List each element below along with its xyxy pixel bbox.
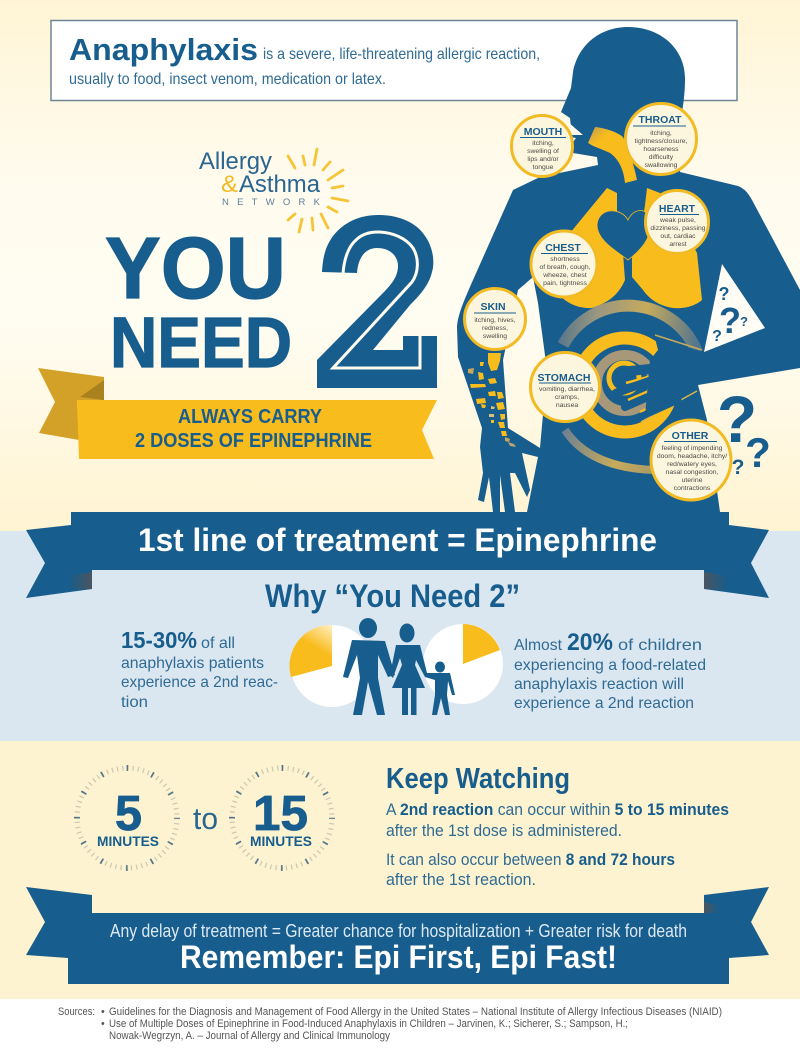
symptom: throat: THROAT <box>639 114 682 126</box>
text block: keep watching <box>386 763 729 889</box>
sources: Sources: <box>58 1006 95 1018</box>
blue ribbon: 1st line of treatment: 1st line of treatment = Epinephrine <box>138 522 657 558</box>
stat: almost 20%: experiencing a food-related <box>514 657 706 674</box>
stat: 15-30% <box>121 627 278 711</box>
question marks: ? <box>717 382 757 456</box>
symptom: chest: of breath, cough, <box>539 264 591 271</box>
symptom: stomach <box>530 352 600 422</box>
symptom: mouth: tongue <box>533 164 554 171</box>
stat: 15-30%: of all <box>201 635 235 652</box>
skin rash <box>468 353 516 447</box>
big outlined numeral 2 <box>317 215 437 388</box>
stat: almost 20%: anaphylaxis reaction will <box>514 676 684 693</box>
stat: 15-30%: anaphylaxis patients <box>121 655 264 672</box>
symptom: other <box>651 420 731 500</box>
logo: Allergy & Asthma Network: Allergy <box>199 148 272 175</box>
stat: almost 20%: experience a 2nd reaction <box>514 695 694 712</box>
icon: sun rays <box>288 149 348 232</box>
blue ribbon: 1st line of treatment <box>26 512 769 598</box>
sources <box>58 1006 722 1042</box>
text block: keep watching: A 2nd reaction can occur within 5 to 15 minutes <box>386 801 729 819</box>
text block: keep watching: after the 1st reaction. <box>386 871 536 889</box>
body figure <box>457 27 800 512</box>
heart <box>597 210 650 260</box>
clock: 5 minutes: MINUTES <box>97 834 159 849</box>
child <box>425 662 455 715</box>
sources: Guidelines for the Diagnosis and Management of Food Allergy in the United States – National Institute of Allergy Infectious Diseases (NIAID) <box>109 1006 722 1018</box>
clock: 15 minutes: 15 <box>253 787 308 841</box>
symptom: skin: swelling <box>483 333 507 340</box>
logo: Allergy & Asthma Network: & <box>221 171 238 198</box>
symptom: throat: hoarseness <box>643 146 679 153</box>
pie chart: 20% <box>423 624 503 704</box>
background: top cream panel <box>0 0 800 531</box>
mouth gap <box>568 122 583 135</box>
symptom: other: contractions <box>674 485 711 492</box>
text block: keep watching: It can also occur between 8 and 72 hours <box>386 851 675 869</box>
symptom: skin <box>464 288 526 350</box>
symptom: throat: swallowing <box>645 162 678 169</box>
text block: keep watching: after the 1st dose is administered. <box>386 822 622 840</box>
symptom: mouth: swelling of <box>527 148 559 155</box>
sources: Use of Multiple Doses of Epinephrine in Food-Induced Anaphylaxis in Children – Jarvinen, K.; Sicherer, S.; Sampson, H.; <box>109 1018 628 1030</box>
clock: 5 minutes: 5 <box>115 787 142 841</box>
headline: YOU NEED <box>105 220 292 383</box>
stomach rings <box>563 306 697 470</box>
symptom: heart: out, cardiac <box>660 233 696 240</box>
triangle gap <box>704 264 765 352</box>
icon: family <box>343 618 455 715</box>
woman <box>390 624 440 715</box>
gold ribbon: always carry <box>38 368 437 459</box>
blue ribbon: remember: Remember: Epi First, Epi Fast! <box>180 939 617 975</box>
logo: Allergy & Asthma Network: Asthma <box>239 171 321 198</box>
text block: keep watching: Keep Watching <box>386 763 570 795</box>
symptom: other: doom, headache, itchy/ <box>657 453 727 460</box>
stat: 15-30%: tion <box>121 694 148 711</box>
symptom: skin: redness, <box>482 325 508 332</box>
stat: 15-30%: experience a 2nd reac- <box>121 674 278 691</box>
symptom: mouth <box>512 116 572 176</box>
hand on stomach <box>616 335 720 422</box>
question marks <box>712 284 771 479</box>
headline: YOU NEED: YOU <box>105 220 286 317</box>
symptom: chest: CHEST <box>545 242 581 254</box>
logo: Allergy & Asthma Network <box>199 148 348 232</box>
symptom: chest <box>531 231 597 297</box>
heading: why you need 2: Why “You Need 2” <box>265 578 520 614</box>
symptom: throat: itching, <box>650 130 672 137</box>
text: to: to <box>193 801 218 836</box>
gold ribbon: always carry: ALWAYS CARRY <box>178 406 323 428</box>
question marks: ? <box>718 284 730 304</box>
stat: almost 20%: 20% <box>567 629 613 656</box>
symptom: skin: SKIN <box>480 301 506 313</box>
intro box: usually to food, insect venom, medication or latex. <box>69 71 386 88</box>
symptom: stomach: STOMACH <box>538 372 590 384</box>
lungs <box>552 188 625 308</box>
symptom: skin: itching, hives, <box>474 317 516 324</box>
silhouette <box>457 27 800 512</box>
symptom: heart <box>646 190 708 254</box>
intro box <box>51 20 737 100</box>
symptom: stomach: cramps, <box>555 394 579 401</box>
symptom: heart: weak pulse, <box>659 217 696 224</box>
stat: 15-30%: 15-30% <box>121 627 197 653</box>
symptom: mouth: lips and/or <box>527 156 559 163</box>
symptom: other: nasal congestion, <box>666 469 719 476</box>
blue ribbon: remember <box>26 887 769 984</box>
sources: Nowak-Wegrzyn, A. – Journal of Allergy and Clinical Immunology <box>109 1030 391 1042</box>
clock: 15 minutes: MINUTES <box>250 834 312 849</box>
panel: keep watching <box>0 741 800 999</box>
sources: • <box>101 1006 105 1018</box>
symptom: other: feeling of impending <box>662 445 723 452</box>
blue ribbon: remember: Any delay of treatment = Greater chance for hospitalization + Greater risk for death <box>110 921 687 941</box>
symptom: stomach: nausea <box>556 402 578 409</box>
clock: 5 minutes <box>77 768 177 868</box>
symptom: chest: wheeze, chest <box>542 272 587 279</box>
symptom: other: OTHER <box>672 430 709 442</box>
intro box: is a severe, life-threatening allergic reaction, <box>263 46 540 63</box>
throat airway <box>588 127 637 183</box>
symptom: throat: tightness/closure, <box>635 138 688 145</box>
question marks: ? <box>732 456 744 479</box>
symptom: heart: arrest <box>669 241 687 248</box>
logo: Allergy & Asthma Network: NETWORK <box>222 197 321 208</box>
symptom: mouth: itching, <box>532 140 554 147</box>
symptom: other: red/watery eyes, <box>667 461 717 468</box>
stat: almost 20% <box>514 629 706 712</box>
stat: almost 20%: Almost <box>514 637 563 654</box>
gold ribbon: always carry: 2 DOSES OF EPINEPHRINE <box>135 430 372 452</box>
question marks: ? <box>712 328 722 345</box>
question marks: ? <box>745 429 771 476</box>
symptom: chest: pain, tightness <box>543 280 588 287</box>
intro box: Anaphylaxis <box>69 32 258 67</box>
panel: why you need 2 <box>0 531 800 741</box>
symptom: mouth: MOUTH <box>524 126 562 138</box>
symptom: chest: shortness <box>550 256 580 263</box>
pie chart: 15-30% <box>289 625 373 707</box>
headline: YOU NEED: NEED <box>110 304 292 383</box>
question marks: ? <box>719 300 741 341</box>
symptom: throat: difficulty <box>649 154 674 161</box>
sources: • <box>101 1018 105 1030</box>
symptom: throat <box>626 104 696 174</box>
man <box>343 618 395 715</box>
symptom: heart: HEART <box>659 203 696 215</box>
symptom: heart: dizziness, passing <box>650 225 706 232</box>
symptom: other: uterine <box>682 477 703 484</box>
symptom: stomach: vomiting, diarrhea, <box>539 386 595 393</box>
clock: 15 minutes <box>232 768 332 868</box>
question marks: ? <box>740 314 748 329</box>
stat: almost 20%: of children <box>618 637 702 654</box>
